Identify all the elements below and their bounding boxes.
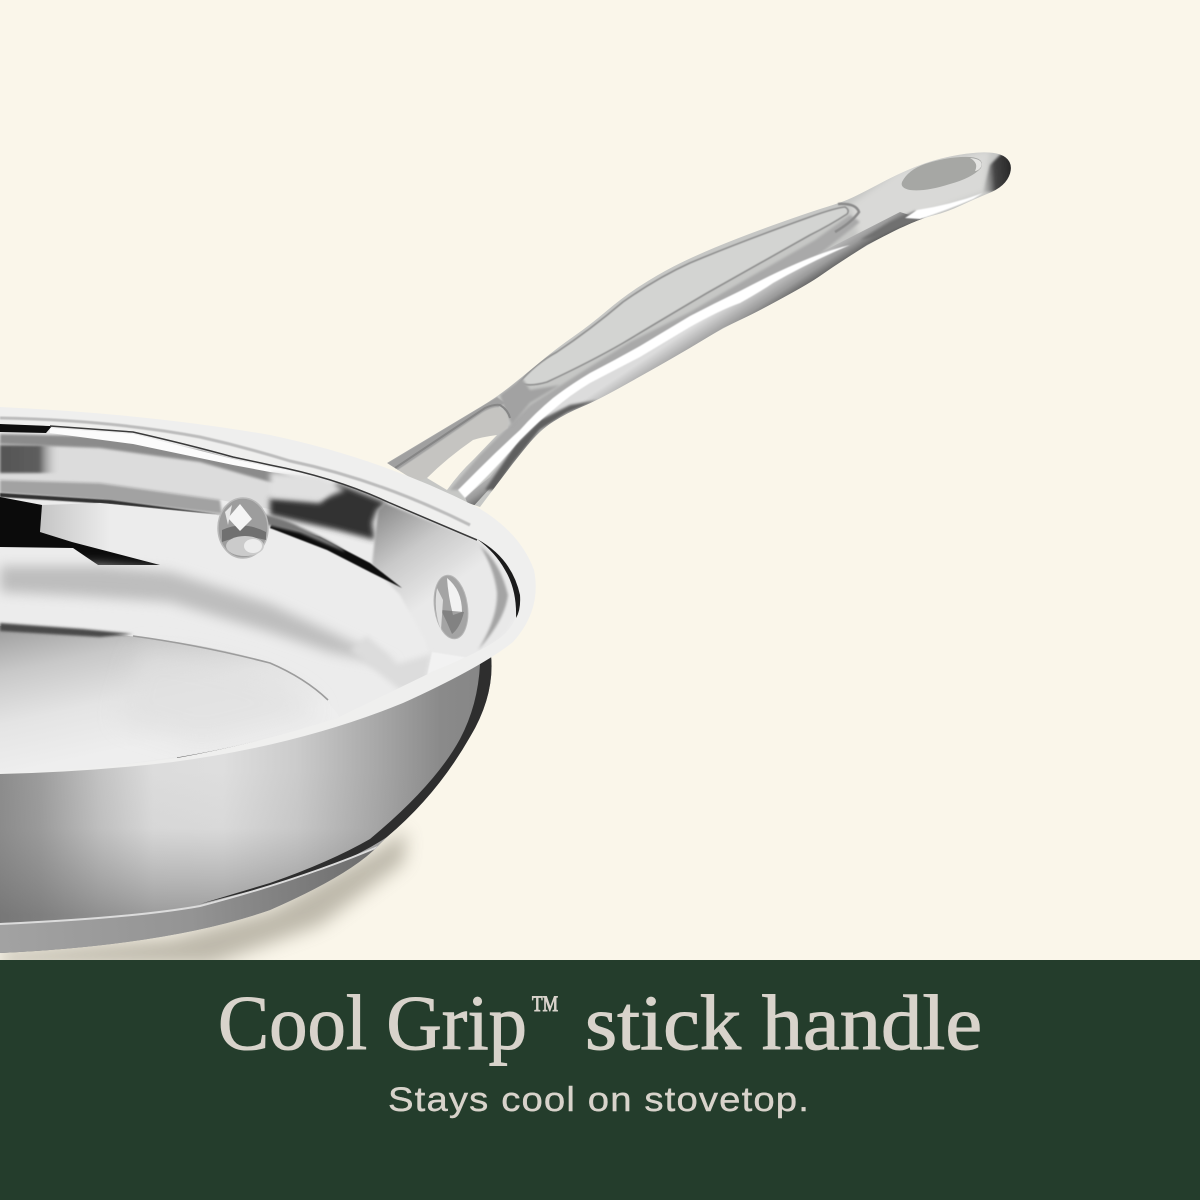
right wall xyxy=(371,502,484,604)
floor edge dark line xyxy=(0,623,133,637)
inner crescent xyxy=(477,539,520,618)
title: TM xyxy=(532,991,558,1016)
lower light strip xyxy=(92,561,98,565)
under-rim grey band xyxy=(0,432,288,483)
inner rim dark line xyxy=(50,426,477,540)
handle gap xyxy=(427,435,497,490)
title: Cool Grip xyxy=(218,979,527,1066)
black rim patch xyxy=(0,424,52,433)
icon: rivet lower xyxy=(430,573,472,641)
left dark blob xyxy=(0,445,60,473)
mid band xyxy=(0,480,222,514)
black reflection xyxy=(0,497,160,565)
white streak xyxy=(458,245,850,498)
upper wall band xyxy=(0,443,272,509)
black streak xyxy=(270,523,402,588)
title xyxy=(218,979,982,1066)
upper arm xyxy=(387,397,505,472)
underside shade xyxy=(465,212,925,510)
icon: rivet upper xyxy=(218,498,268,558)
title: stick handle xyxy=(585,979,982,1066)
pan floor xyxy=(0,626,272,724)
base highlight xyxy=(0,846,380,924)
mid grey band xyxy=(450,215,860,490)
lower wall sheen xyxy=(352,638,430,688)
handle head xyxy=(851,152,990,234)
dark tip xyxy=(983,154,1011,193)
main grey lens xyxy=(519,207,848,385)
base ring xyxy=(0,846,378,953)
white streak below rim xyxy=(50,428,308,475)
pan interior xyxy=(0,424,510,758)
pan rim shading xyxy=(0,418,470,525)
floor shadow xyxy=(0,830,406,965)
icon: stainless stick handle xyxy=(387,150,1016,510)
lens tip shade xyxy=(835,204,859,232)
dark upper wall reflections xyxy=(270,483,387,540)
caption band xyxy=(0,960,1200,1200)
pan rolled rim xyxy=(0,407,536,774)
pan outer body xyxy=(0,657,492,953)
front rim line xyxy=(176,742,254,758)
head white streak xyxy=(905,193,983,219)
neck shading xyxy=(500,378,560,425)
light wedge xyxy=(40,503,217,548)
lower wall grey band xyxy=(0,566,397,665)
wall sheen beside crescent xyxy=(478,546,508,650)
dark side band xyxy=(200,655,492,904)
background xyxy=(0,0,1200,960)
handle hole xyxy=(902,157,982,190)
subtitle: Stays cool on stovetop. xyxy=(388,1081,810,1119)
panel: cookware photo xyxy=(0,150,1016,970)
